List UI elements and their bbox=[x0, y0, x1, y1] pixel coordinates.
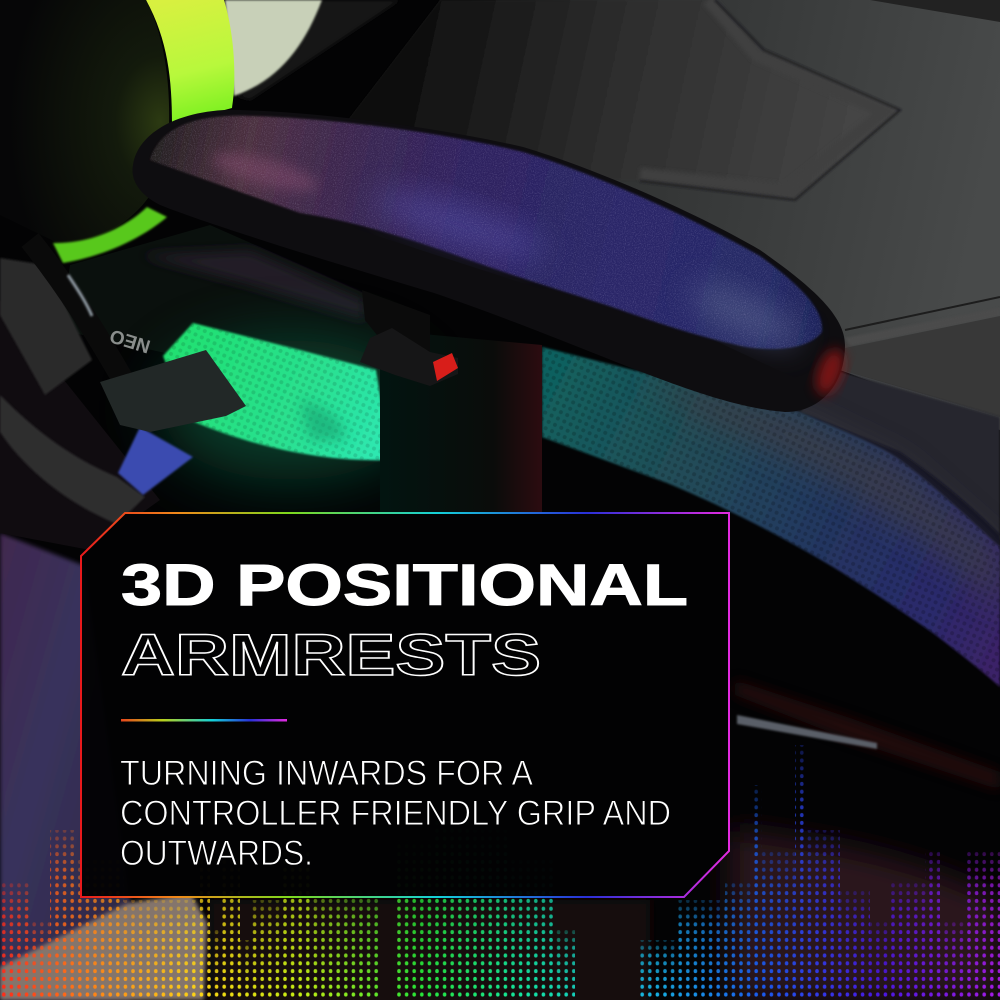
armrest grain bbox=[150, 116, 822, 349]
body text bbox=[120, 754, 671, 873]
red cushion edge bbox=[735, 680, 1000, 790]
pale fabric bottom left bbox=[0, 893, 207, 1000]
purple floor bbox=[0, 533, 130, 1000]
side bolster seam bbox=[845, 308, 1000, 346]
star panel ridge bbox=[640, 0, 884, 190]
shadow under armrest bbox=[60, 225, 380, 400]
carbon strip bbox=[140, 250, 365, 320]
blue lit panel bbox=[118, 427, 193, 495]
grey sheen on mesh band bbox=[640, 375, 1000, 610]
RGB equaliser dots bbox=[2, 745, 1000, 1000]
rainbow divider bbox=[121, 719, 287, 722]
upper right carbon trim bbox=[870, 0, 1000, 22]
seat back upholstery bbox=[340, 0, 1000, 430]
recline lever bbox=[100, 350, 246, 432]
body text: OUTWARDS. bbox=[120, 834, 313, 873]
armrest mauve highlight bbox=[209, 145, 321, 199]
red adjuster button bbox=[433, 353, 458, 381]
lime lit mesh strip bbox=[146, 0, 234, 124]
armrest pad bbox=[132, 110, 849, 412]
dark dotted mesh strip bbox=[800, 370, 1000, 540]
bolster seam dark line bbox=[845, 297, 1000, 330]
green lit mesh bbox=[163, 323, 390, 460]
armrest base bbox=[132, 110, 845, 412]
maroon floor bbox=[730, 830, 1000, 1000]
armrest blue highlight bbox=[369, 180, 551, 270]
navy gap under strip bbox=[800, 412, 1000, 548]
cable highlight bbox=[68, 275, 92, 316]
green glow halo bbox=[160, 340, 420, 480]
armrest grey tip highlight bbox=[683, 273, 807, 357]
green mesh texture bbox=[163, 323, 390, 460]
white lit mesh strip bbox=[225, 0, 322, 96]
panel frame with rainbow border bbox=[81, 513, 729, 897]
armrest top surface bbox=[150, 116, 822, 349]
headrest bbox=[0, 0, 169, 244]
text panel bbox=[81, 513, 729, 897]
star panel outer seam bbox=[640, 0, 900, 200]
support column bbox=[380, 330, 542, 512]
cable bbox=[30, 240, 122, 378]
lower base strip bbox=[0, 395, 145, 524]
armrest red tip glow bbox=[811, 345, 849, 399]
upper base block bbox=[0, 258, 92, 395]
shadow on green mesh bbox=[300, 400, 345, 440]
logo on seat base: NEO bbox=[107, 324, 153, 357]
teal and blue mesh band bbox=[542, 347, 1000, 687]
body text: TURNING INWARDS FOR A bbox=[120, 754, 534, 793]
armrest bracket bbox=[362, 290, 430, 355]
dark floor centre bbox=[210, 900, 650, 1000]
heading line two outlined: ARMRESTS bbox=[121, 623, 541, 688]
lower bolster panel bbox=[835, 316, 1000, 417]
stitched star panel bbox=[340, 0, 900, 200]
adjuster button housing bbox=[360, 328, 458, 386]
chair base dark body bbox=[0, 300, 160, 550]
heading line one: 3D POSITIONAL bbox=[121, 553, 688, 618]
dark band beside white strip bbox=[236, 0, 400, 100]
mesh band texture bbox=[542, 347, 1000, 687]
body text: CONTROLLER FRIENDLY GRIP AND bbox=[120, 794, 671, 833]
lime lower arc bbox=[53, 207, 167, 263]
metal strip highlight bbox=[737, 715, 877, 749]
